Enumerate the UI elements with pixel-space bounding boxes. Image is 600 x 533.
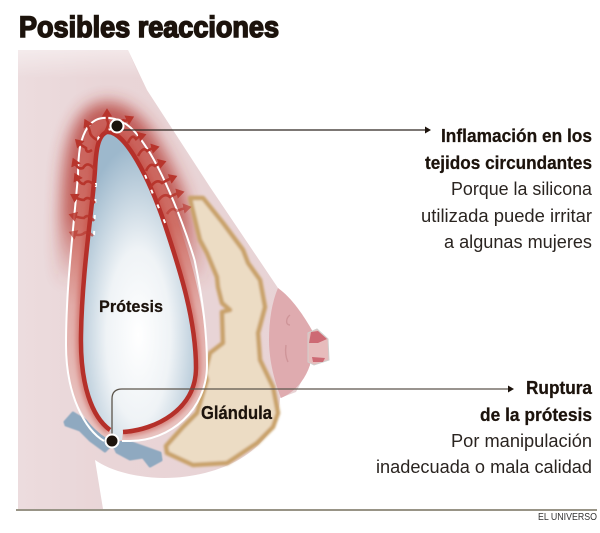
- label: Glándula: Glándula: [201, 403, 273, 423]
- leader arrow: rupture: [106, 386, 514, 448]
- white dashed line: [94, 129, 166, 236]
- implant capsule outer band: [66, 118, 207, 441]
- areola: [269, 288, 313, 398]
- leaked silicone: [65, 413, 161, 466]
- silicone implant: [81, 132, 196, 440]
- text block: inflammation: [421, 126, 593, 252]
- text block: rupture: inadecuada o mala calidad: [376, 457, 592, 477]
- label: Prótesis: Prótesis: [99, 297, 163, 316]
- white capsule line: [66, 118, 207, 441]
- title: Posibles reacciones: [19, 11, 279, 44]
- body silhouette: [18, 50, 310, 509]
- inflammation arrows: [74, 114, 186, 236]
- inflammation glow: [72, 116, 196, 290]
- nipple: [286, 315, 329, 365]
- text block: inflammation: utilizada puede irritar: [421, 206, 592, 226]
- text block: inflammation: a algunas mujeres: [444, 232, 592, 252]
- text block: rupture: Ruptura: [526, 378, 593, 398]
- leader arrow: inflammation: [110, 120, 431, 134]
- text block: rupture: de la prótesis: [480, 405, 592, 425]
- text block: inflammation: Inflamación en los: [441, 126, 592, 146]
- red capsule shading: [81, 132, 196, 432]
- illustration: breast cross-section: [18, 50, 329, 509]
- text block: rupture: Por manipulación: [451, 431, 592, 451]
- text block: inflammation: Porque la silicona: [451, 179, 593, 199]
- text block: inflammation: tejidos circundantes: [425, 153, 592, 173]
- text block: rupture: [376, 378, 593, 477]
- gland: [166, 198, 278, 465]
